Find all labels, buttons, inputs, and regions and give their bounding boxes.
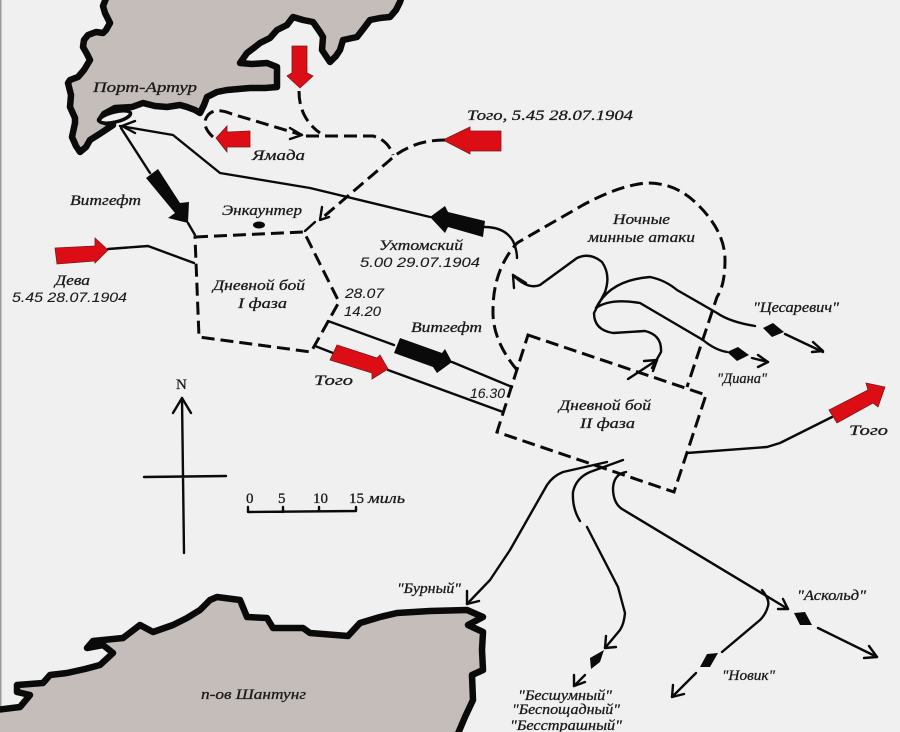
icon: ship diamond [794, 612, 812, 625]
panel: night torpedo attacks [493, 183, 725, 387]
scale labels: 10 [313, 491, 328, 507]
Yamada squadron route [205, 46, 393, 164]
icon: ship diamond [590, 650, 604, 669]
label: Togo right: Того [849, 423, 889, 439]
night manoeuvre curve [513, 256, 661, 379]
Burny route [397, 462, 607, 604]
Tsesarevich route [596, 277, 840, 352]
label: Encounter: Энкаунтер [222, 203, 303, 219]
label: Shandong: п-ов Шантунг [201, 687, 306, 703]
panel: day battle phase I [195, 232, 339, 352]
scale labels: 5 [278, 491, 286, 507]
panel: day battle phase I: I фаза [237, 296, 287, 312]
scale bar [246, 491, 405, 512]
red arrow: Togo, middle [330, 345, 388, 379]
label: Deva: Дева [53, 273, 90, 289]
icon: ship diamond [700, 653, 718, 667]
black arrow: Ukhtomsky [430, 206, 485, 237]
land: Shandong peninsula [0, 597, 483, 732]
label: Ukhtomsky: Ухтомский [379, 238, 464, 254]
black arrow: Vitgeft, middle [394, 338, 452, 373]
routes between phases [314, 320, 512, 412]
panel: day battle phase II: II фаза [579, 416, 635, 432]
icon: ship diamond [763, 323, 784, 337]
label: Diana: "Диана" [717, 371, 768, 387]
label: phase II: Дневной бой [557, 398, 652, 414]
Deva route [12, 238, 194, 305]
scale labels [246, 491, 405, 507]
panel: night torpedo attacks: минные атаки [587, 230, 695, 246]
scale labels: миль [367, 491, 405, 507]
red arrow: Togo, right [829, 383, 885, 423]
icon: ship diamond [727, 347, 749, 361]
label: Yamada: Ямада [251, 148, 305, 164]
land: Port Arthur peninsula [68, 0, 402, 152]
label: N: N [176, 377, 187, 393]
label: 16.30: 16.30 [470, 385, 505, 401]
scale labels: 0 [246, 491, 254, 507]
Vitgeft exit route [70, 128, 195, 235]
scale labels: 15 [349, 491, 364, 507]
Novik route [672, 590, 776, 697]
Encounter marker [222, 203, 303, 228]
label: 28.07 14.20: 28.07 [344, 285, 385, 301]
Togo exit route [687, 383, 889, 453]
label: Ukhtomsky time: 5.00 29.07.1904 [360, 254, 480, 270]
label: Askold: "Аскольд" [797, 588, 867, 604]
label: Novik: "Новик" [722, 668, 776, 684]
label: Tsesarevich: "Цесаревич" [753, 300, 840, 316]
Askold route [613, 472, 877, 658]
compass [144, 377, 226, 553]
black arrow: Vitgeft, top [146, 169, 189, 223]
label: 28.07 14.20 [344, 285, 385, 319]
label: 28.07 14.20: 14.20 [344, 303, 381, 319]
red arrow: Yamada, west [216, 126, 250, 152]
destroyers route [510, 460, 625, 732]
red arrow: Togo, top [443, 127, 501, 154]
label: Port Arthur: Порт-Артур [92, 80, 198, 96]
label: Vitgeft: Витгефт [70, 193, 141, 209]
label: Togo middle: Того [314, 373, 354, 389]
label: phase I: Дневной бой [211, 278, 306, 294]
harbour entrance [98, 108, 132, 126]
label: destroyers: "Бесшумный" [518, 688, 613, 704]
Togo approach route [305, 108, 634, 231]
destroyers route: "Беспощадный" [512, 702, 621, 718]
Diana route [596, 301, 768, 387]
label: Burny: "Бурный" [397, 581, 462, 597]
label: Vitgeft middle: Витгефт [411, 320, 482, 336]
label: Deva time: 5.45 28.07.1904 [12, 289, 127, 305]
red arrow: Yamada, north [287, 46, 313, 88]
Ukhtomsky return route [120, 121, 517, 270]
label: Togo 5.45: Того, 5.45 28.07.1904 [467, 108, 634, 124]
label: night attacks: Ночные [612, 212, 670, 228]
red arrow: Deva [55, 238, 108, 264]
panel: day battle phase II [497, 335, 706, 492]
